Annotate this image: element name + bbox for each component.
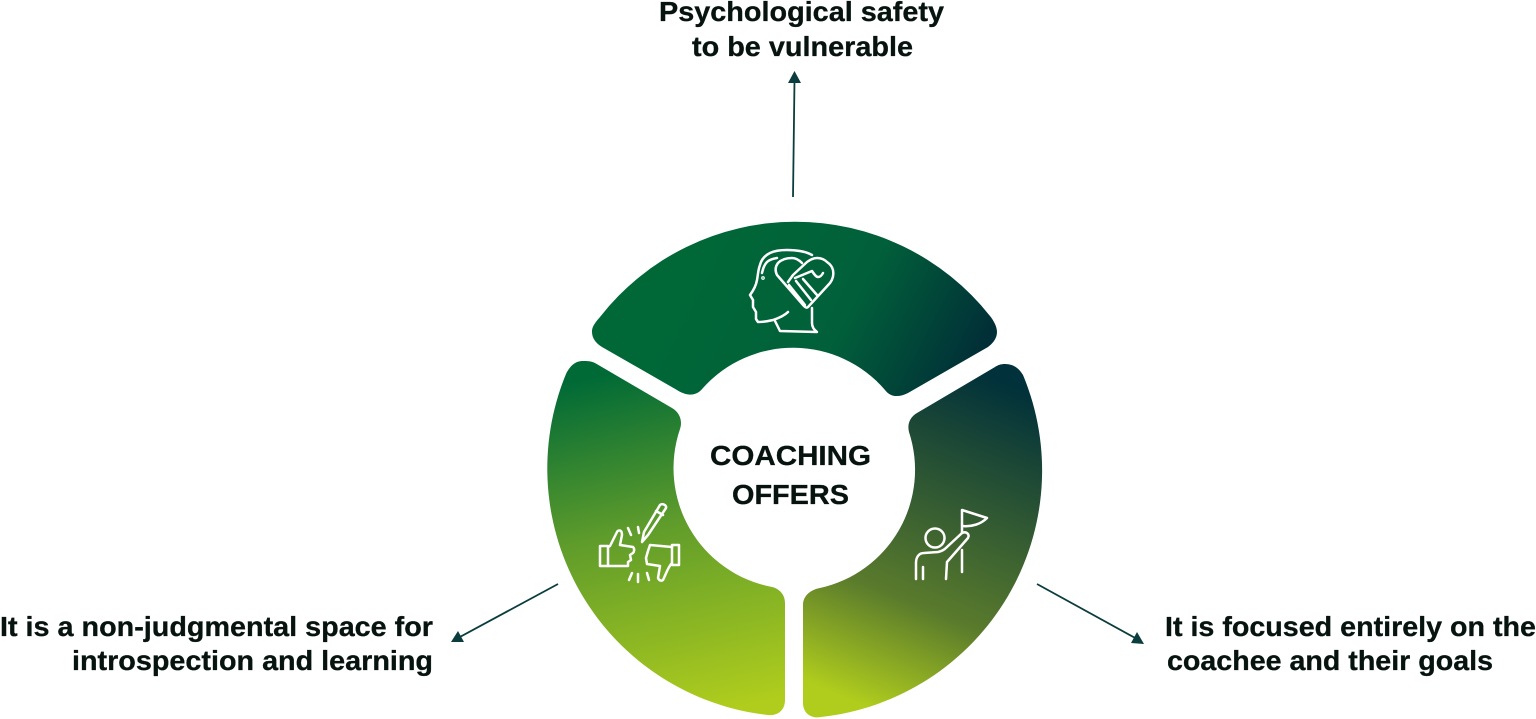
label: non-judgmental space [0,611,433,676]
label: psychological safety [659,0,944,62]
center heading: COACHING [710,440,871,471]
label: non-judgmental space: introspection and learning [72,645,433,676]
label: focused on coachee: coachee and their goals [1167,645,1493,676]
label: focused on coachee [1165,611,1536,676]
arrow: to right label [1037,584,1144,644]
arrow: to left label [451,584,558,642]
segment: psychological safety [592,222,997,396]
center heading: OFFERS [732,479,849,510]
icon: head with heart handshake [750,250,833,332]
segment: focused on coachee [803,364,1042,717]
label: focused on coachee: It is focused entirely on the [1165,611,1536,642]
label: non-judgmental space: It is a non-judgmental space for [0,611,433,642]
segment: non-judgmental space [547,361,785,715]
icon: thumbs up, thumbs down and pencil [600,504,679,582]
center heading [710,440,871,510]
icon: person raising a flag [916,510,987,579]
label: psychological safety: to be vulnerable [692,31,913,62]
arrow: to top label [788,71,801,197]
